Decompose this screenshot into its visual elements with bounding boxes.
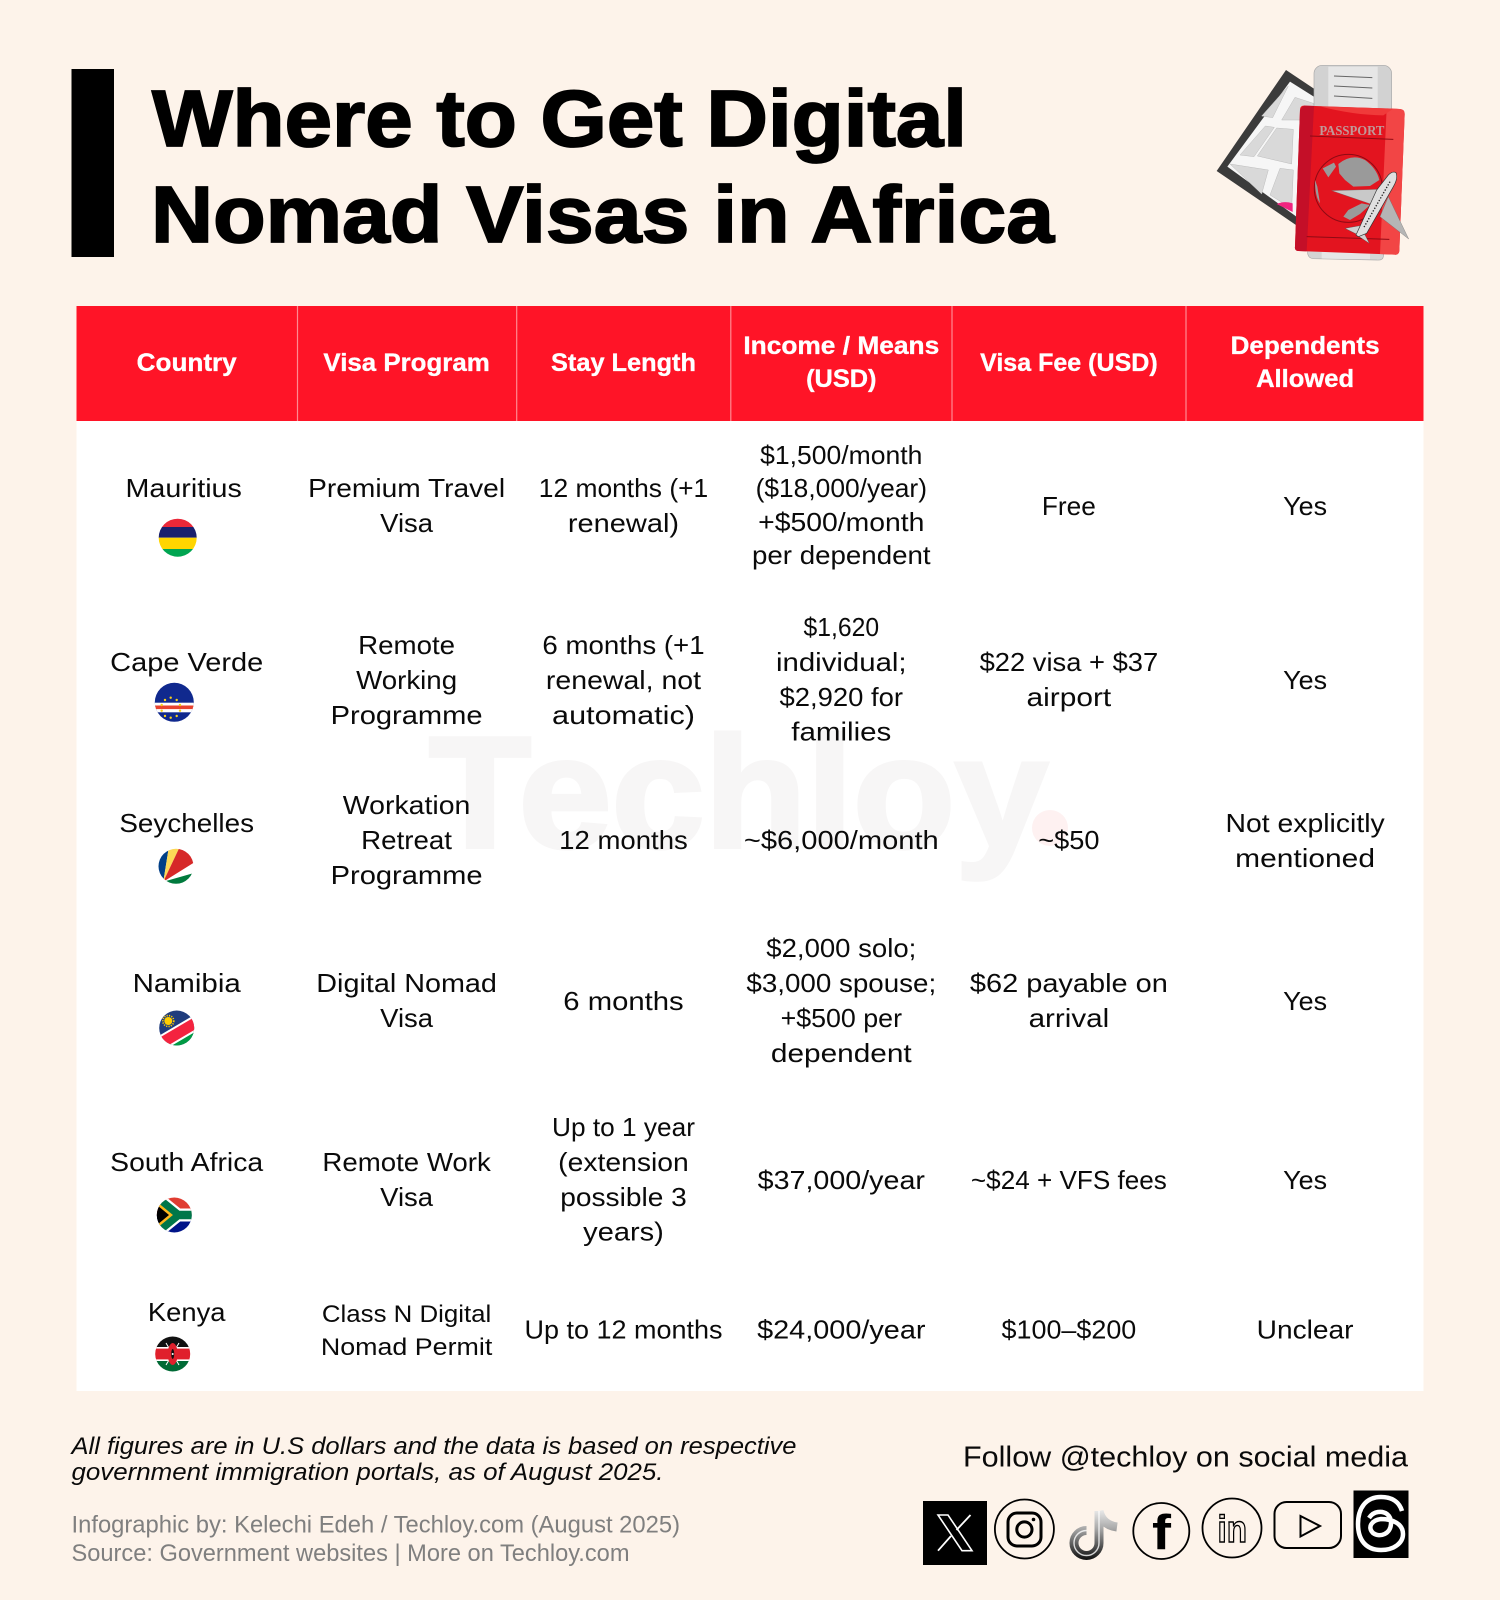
boarding pass	[1308, 65, 1392, 260]
row: South Africa	[110, 1112, 1327, 1247]
passport cover	[1295, 106, 1405, 255]
row: Seychelles: ~$50	[1038, 825, 1100, 855]
passport cover: PASSPORT	[1319, 123, 1384, 138]
row: Mauritius: Mauritius	[126, 473, 242, 503]
row: South Africa: Visa	[380, 1182, 434, 1212]
row: South Africa: possible 3	[560, 1182, 687, 1212]
social icons	[923, 1490, 1408, 1565]
row: Kenya: Class N Digital	[322, 1301, 491, 1328]
footnote	[69, 1433, 797, 1486]
row: Mauritius: Premium Travel	[308, 473, 505, 503]
flag: Seychelles	[158, 848, 194, 884]
row: Namibia: dependent	[771, 1038, 913, 1068]
row: South Africa: (extension	[558, 1147, 689, 1177]
credits: Infographic by: Kelechi Edeh / Techloy.com (August 2025)	[72, 1512, 680, 1539]
row: Kenya: Kenya	[148, 1297, 226, 1327]
row: Seychelles: Retreat	[361, 825, 453, 855]
row: Namibia: Visa	[380, 1003, 434, 1033]
row: Namibia	[133, 933, 1327, 1068]
map	[1217, 70, 1315, 237]
row: Kenya: $24,000/year	[757, 1315, 926, 1345]
icon: YouTube	[1274, 1502, 1341, 1548]
row: Cape Verde: $2,920 for	[780, 682, 903, 712]
row: Seychelles: Workation	[343, 790, 470, 820]
row: Mauritius: Visa	[380, 508, 434, 538]
globe	[1314, 154, 1382, 222]
icon: Facebook	[1133, 1503, 1189, 1560]
row: Namibia: Digital Nomad	[316, 968, 497, 998]
credits	[72, 1512, 680, 1567]
row: Cape Verde: Working	[356, 665, 457, 695]
table header: Dependents	[1231, 332, 1380, 360]
row: Namibia: arrival	[1029, 1003, 1109, 1033]
row: Namibia: 6 months	[563, 986, 684, 1016]
flag: Mauritius	[158, 518, 198, 558]
row: Mauritius: per dependent	[752, 540, 931, 570]
row: Kenya	[148, 1297, 1354, 1372]
row: Namibia: $2,000 solo;	[766, 933, 916, 963]
icon: LinkedIn: in	[1218, 1509, 1247, 1551]
row: Seychelles: ~$6,000/month	[744, 825, 939, 855]
icon: LinkedIn	[1202, 1498, 1262, 1558]
airplane	[1332, 172, 1409, 243]
flag: Namibia	[159, 1010, 194, 1046]
table	[76, 306, 1424, 1391]
row: Seychelles	[119, 790, 1385, 890]
row: South Africa: ~$24 + VFS fees	[971, 1165, 1167, 1195]
row: Namibia: Namibia	[133, 968, 241, 998]
flag: South Africa	[156, 1198, 192, 1232]
row: Namibia: $3,000 spouse;	[746, 968, 936, 998]
table body background	[76, 420, 1424, 1391]
row: Cape Verde: Yes	[1283, 665, 1327, 695]
footnote: government immigration portals, as of August 2025.	[72, 1459, 664, 1486]
title: Where to Get Digital	[152, 74, 967, 163]
row: Cape Verde: $1,620	[804, 612, 879, 642]
icon: passport with map and boarding pass	[1217, 65, 1409, 260]
flag: Cape Verde	[154, 682, 195, 723]
row: Cape Verde: individual;	[776, 647, 907, 677]
row: Cape Verde: Remote	[358, 630, 455, 660]
icon: Threads	[1354, 1490, 1408, 1558]
title	[151, 74, 1055, 259]
row: Cape Verde: 6 months (+1	[542, 630, 705, 660]
row: Cape Verde: airport	[1027, 682, 1112, 712]
row: South Africa: Up to 1 year	[552, 1112, 695, 1142]
table header: Allowed	[1256, 365, 1354, 393]
row: Mauritius: Free	[1042, 491, 1096, 521]
row: Kenya: $100–$200	[1002, 1315, 1136, 1345]
row: Seychelles: Seychelles	[119, 808, 254, 838]
row: Cape Verde	[110, 612, 1327, 747]
row: Kenya: Nomad Permit	[321, 1334, 493, 1361]
table header: (USD)	[806, 365, 876, 393]
table header: Country	[137, 349, 237, 377]
row: Namibia: $62 payable on	[970, 968, 1168, 998]
icon: TikTok	[1074, 1511, 1117, 1555]
row: Cape Verde: Cape Verde	[110, 647, 263, 677]
row: Namibia: +$500 per	[781, 1003, 902, 1033]
title accent bar	[72, 69, 114, 257]
row: Cape Verde: Programme	[331, 700, 483, 730]
icon: Instagram	[995, 1500, 1054, 1558]
row: Mauritius: 12 months (+1	[539, 473, 708, 503]
row: Mauritius: Yes	[1283, 491, 1327, 521]
row: Seychelles: Programme	[331, 860, 483, 890]
table header: Visa Fee (USD)	[980, 349, 1158, 377]
row: Seychelles: 12 months	[559, 825, 688, 855]
row: Seychelles: Not explicitly	[1226, 808, 1385, 838]
watermark: Techloy	[429, 705, 1048, 881]
row: Seychelles: mentioned	[1235, 843, 1375, 873]
table header: Income / Means	[743, 332, 939, 360]
row: Mauritius: +$500/month	[758, 507, 924, 537]
row: Kenya: Unclear	[1257, 1315, 1354, 1345]
row: Namibia: Yes	[1283, 986, 1327, 1016]
row: South Africa: South Africa	[110, 1147, 264, 1177]
row: Mauritius: renewal)	[568, 508, 679, 538]
row: Cape Verde: automatic)	[552, 700, 695, 730]
row: South Africa: years)	[583, 1217, 664, 1247]
footnote: All figures are in U.S dollars and the data is based on respective	[69, 1433, 797, 1460]
row: Mauritius	[126, 440, 1327, 570]
row: Cape Verde: $22 visa + $37	[980, 647, 1158, 677]
icon: X	[923, 1501, 987, 1565]
row: South Africa: Yes	[1283, 1165, 1327, 1195]
row: Kenya: Up to 12 months	[524, 1315, 722, 1345]
icon: Facebook: f	[1152, 1506, 1172, 1560]
row: Mauritius: $1,500/month	[760, 440, 922, 470]
follow text: Follow @techloy on social media	[963, 1442, 1409, 1474]
title: Nomad Visas in Africa	[151, 170, 1055, 259]
table header: Stay Length	[551, 349, 696, 377]
credits: Source: Government websites | More on Techloy.com	[72, 1540, 630, 1567]
row: Cape Verde: renewal, not	[546, 665, 702, 695]
table header: Visa Program	[323, 349, 490, 377]
row: Mauritius: ($18,000/year)	[756, 473, 927, 503]
row: South Africa: Remote Work	[322, 1147, 492, 1177]
table header	[76, 306, 1424, 421]
row: Cape Verde: families	[791, 717, 891, 747]
row: South Africa: $37,000/year	[758, 1165, 925, 1195]
flag: Kenya	[155, 1336, 191, 1372]
